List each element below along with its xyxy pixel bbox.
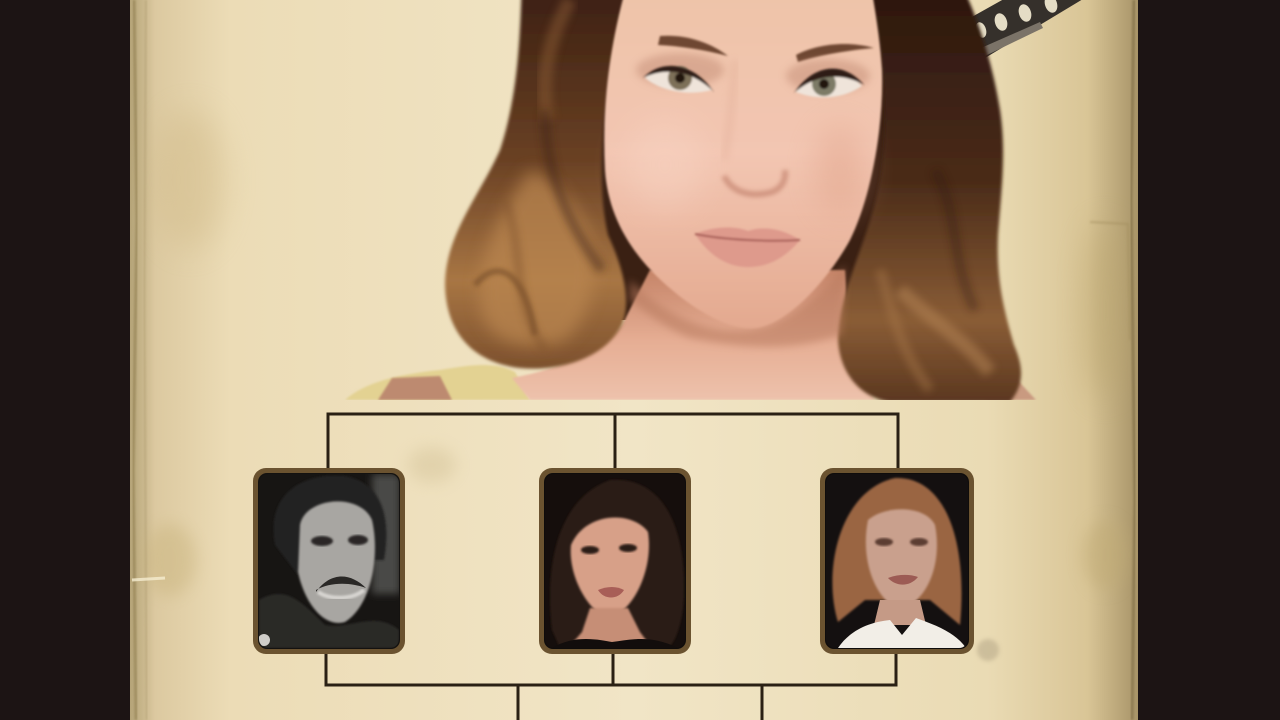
hair left mass xyxy=(442,0,628,372)
panel: parchment xyxy=(130,0,1138,720)
hair back layer xyxy=(599,0,888,320)
face xyxy=(604,0,882,328)
main portrait xyxy=(345,0,1036,402)
lips xyxy=(695,228,800,267)
neck shadow xyxy=(630,265,845,347)
shoulder right xyxy=(1010,382,1036,400)
portrait frame: man xyxy=(253,468,405,654)
connector: top bracket xyxy=(328,414,898,468)
clothing: red band xyxy=(378,376,452,400)
portrait frame: dark-haired woman xyxy=(539,468,691,654)
portrait frame: red-haired woman xyxy=(820,468,974,654)
nose xyxy=(724,170,785,194)
connector: bottom bracket xyxy=(326,654,896,720)
clothing: top xyxy=(345,365,530,400)
neck xyxy=(512,270,875,400)
eye socket shadow xyxy=(636,53,724,87)
hair highlights xyxy=(480,170,594,346)
icon: film strip xyxy=(970,0,1098,58)
hair right mass xyxy=(838,0,1021,402)
infographic: family tree on parchment xyxy=(130,0,1138,720)
brows xyxy=(658,36,728,56)
eyes xyxy=(643,66,864,97)
